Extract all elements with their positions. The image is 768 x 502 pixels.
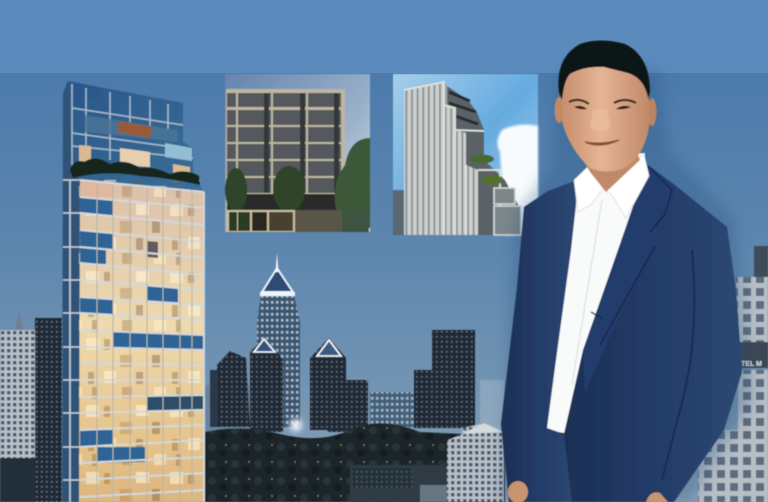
central city towers — [205, 253, 504, 432]
suit jacket — [501, 180, 577, 502]
eyes and brows — [569, 100, 636, 109]
cloud — [497, 125, 538, 235]
trousers and belt — [528, 424, 578, 502]
inset photo: stepped tower — [393, 74, 538, 235]
far left skyline buildings — [0, 310, 62, 502]
blue unlit window patches — [80, 180, 204, 463]
residence base wall — [226, 210, 369, 232]
neck — [574, 145, 640, 192]
portrait: man in navy suit — [501, 40, 742, 502]
white shirt — [546, 153, 645, 433]
lower terraces — [494, 188, 521, 235]
lit glass body — [79, 180, 204, 502]
smile — [585, 140, 619, 145]
foreground low buildings — [350, 423, 504, 502]
tall central tower with lit crown — [257, 253, 300, 427]
main residential tower — [62, 81, 205, 502]
lower twin tower left — [250, 338, 283, 432]
left hand — [508, 481, 528, 502]
nose — [590, 110, 611, 131]
terrace floors — [444, 84, 521, 235]
ear left — [554, 97, 564, 123]
sleeve crease — [662, 250, 694, 480]
rooftop garden — [70, 158, 200, 185]
inset photo: low-rise residence — [225, 74, 370, 232]
tower mullions — [97, 184, 192, 502]
shirt placket — [572, 200, 602, 385]
shirt collar — [574, 154, 649, 218]
lower twin tower right — [310, 338, 346, 430]
ear right — [648, 98, 656, 126]
face — [561, 60, 650, 172]
hotel sign: TEL M — [741, 361, 762, 368]
tower side face — [62, 81, 82, 502]
tower floor slabs — [80, 180, 204, 497]
residence trees — [225, 138, 370, 228]
jacket lapel — [583, 163, 676, 392]
right side city buildings — [698, 246, 768, 502]
terrace planting — [470, 154, 494, 164]
person shadow glow — [500, 70, 752, 502]
top band background — [0, 0, 768, 74]
stepped tower shaft — [404, 82, 478, 235]
residence glazing grid — [227, 93, 341, 210]
park trees — [205, 423, 505, 502]
hair — [558, 40, 650, 100]
right hand at pocket — [646, 492, 668, 502]
tower crown glazing — [68, 81, 204, 193]
